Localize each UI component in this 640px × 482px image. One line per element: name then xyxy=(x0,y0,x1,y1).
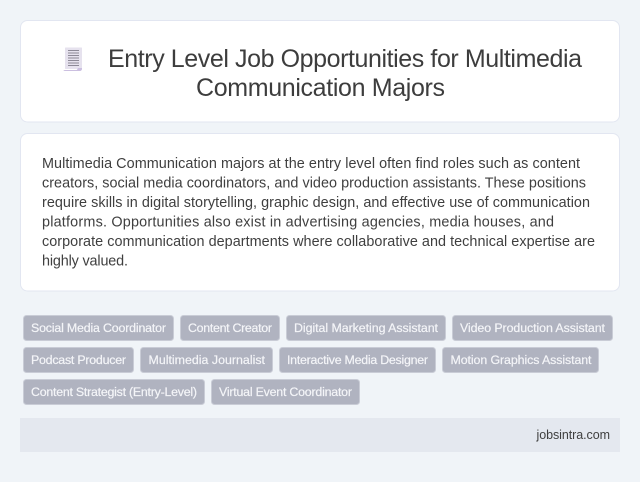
tag: Multimedia Journalist: Multimedia Journalist xyxy=(148,353,266,367)
footer bar xyxy=(20,418,620,452)
tag: Podcast Producer: Podcast Producer xyxy=(31,353,126,367)
tag: Interactive Media Designer: Interactive Media Designer xyxy=(287,353,428,367)
footer source text: jobsintra.com xyxy=(536,428,610,442)
panel: header xyxy=(20,20,620,122)
tag: Motion Graphics Assistant: Motion Graphics Assistant xyxy=(450,353,592,367)
tag: Social Media Coordinator: Social Media Coordinator xyxy=(31,321,166,335)
text block: description: platforms. Opportunities also exist in advertising agencies, media houses, and xyxy=(42,214,554,230)
text block: description: require skills in digital storytelling, graphic design, and effective use of communication xyxy=(42,195,590,211)
text block: description: creators, social media coordinators, and video production assistants. These positions xyxy=(42,176,586,192)
tag: Content Creator xyxy=(180,316,280,340)
tag: Virtual Event Coordinator xyxy=(212,380,360,404)
tag: Video Production Assistant: Video Production Assistant xyxy=(460,321,606,335)
text block: description xyxy=(42,156,595,270)
tag: Virtual Event Coordinator: Virtual Event Coordinator xyxy=(219,385,352,399)
tag: Social Media Coordinator xyxy=(24,316,174,340)
tag: Interactive Media Designer xyxy=(280,348,436,372)
text block: description: corporate communication departments where collaborative and technical expertise are xyxy=(42,234,595,250)
tag: Content Creator: Content Creator xyxy=(188,321,272,335)
tag: Content Strategist (Entry-Level): Content Strategist (Entry-Level) xyxy=(31,385,197,399)
tag: Multimedia Journalist xyxy=(140,348,272,372)
tag: Digital Marketing Assistant xyxy=(286,316,446,340)
title xyxy=(108,45,582,102)
title: Communication Majors xyxy=(196,74,445,102)
title: Entry Level Job Opportunities for Multimedia xyxy=(108,45,582,73)
tag: Video Production Assistant xyxy=(452,316,612,340)
tag group: job titles xyxy=(24,316,612,404)
text block: description: highly valued. xyxy=(42,254,128,270)
icon: document scroll xyxy=(64,48,82,71)
tag: Digital Marketing Assistant: Digital Marketing Assistant xyxy=(294,321,439,335)
tag: Motion Graphics Assistant xyxy=(442,348,598,372)
text block: description: Multimedia Communication majors at the entry level often find roles such as content xyxy=(42,156,580,172)
tag: Podcast Producer xyxy=(24,348,134,372)
tag: Content Strategist (Entry-Level) xyxy=(24,380,204,404)
panel: description xyxy=(20,134,620,291)
